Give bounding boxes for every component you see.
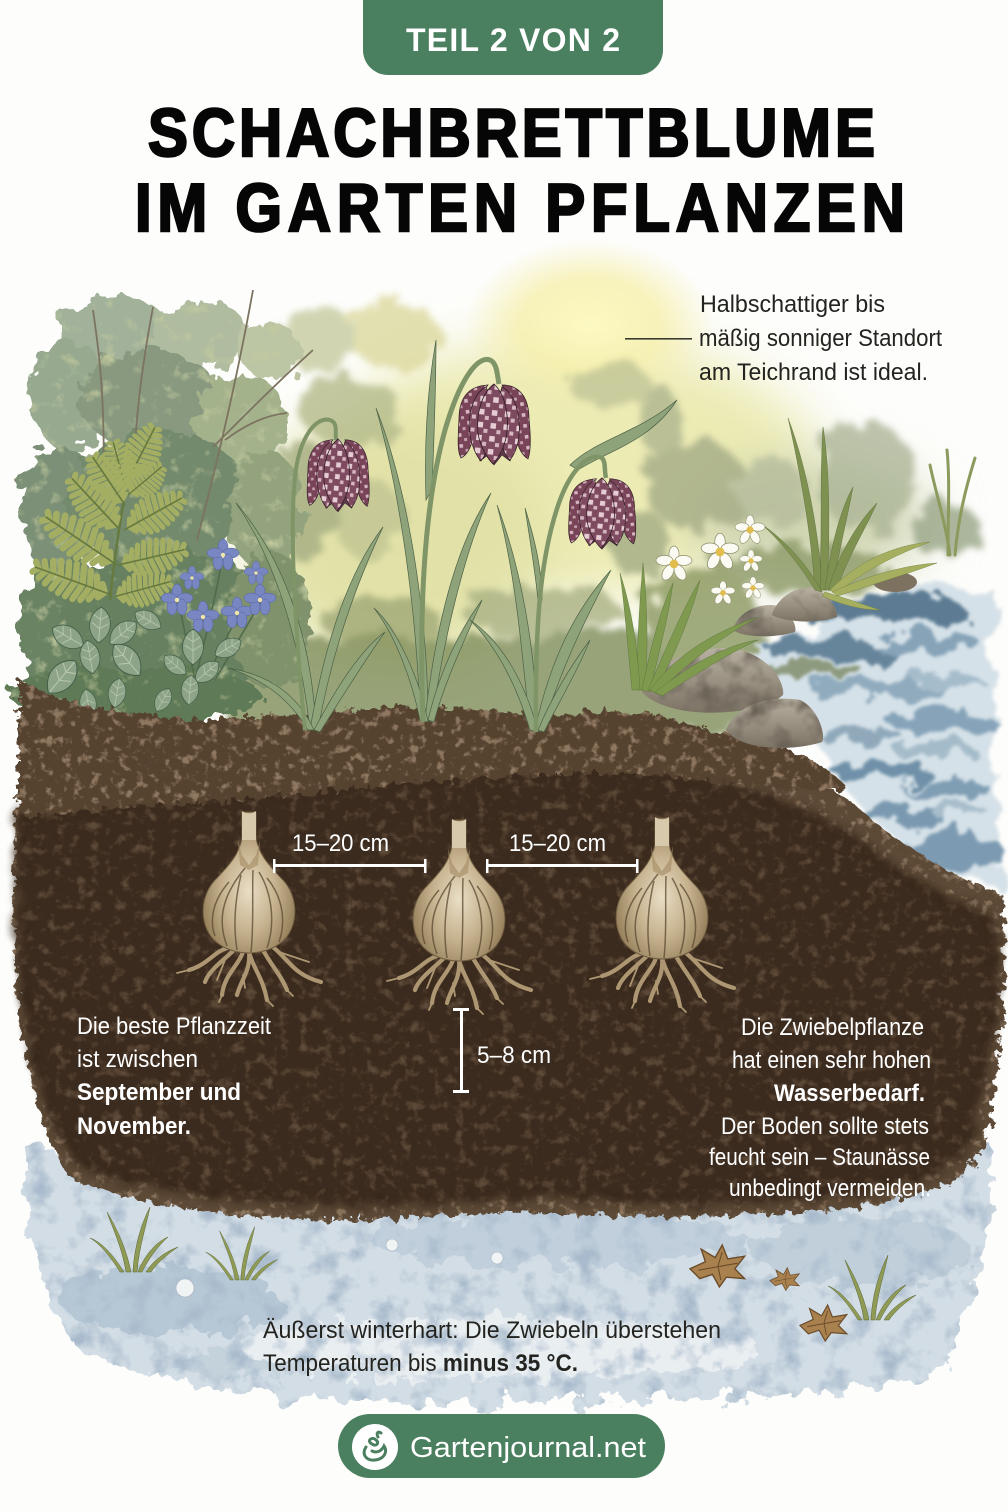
text: planting time bbox=[77, 1013, 271, 1140]
grass tufts bbox=[90, 1207, 916, 1320]
plant: left fritillary bbox=[228, 420, 385, 732]
soil cross-section bbox=[14, 758, 1004, 1220]
topsoil layer bbox=[18, 678, 845, 818]
text: water need: unbedingt vermeiden. bbox=[729, 1175, 931, 1202]
bulb 1 bbox=[177, 811, 321, 1006]
text: water need: Der Boden sollte stets bbox=[721, 1113, 929, 1140]
bulb 3 bbox=[590, 817, 734, 1012]
blue flowers bbox=[161, 539, 276, 680]
pebbles bbox=[176, 1239, 503, 1297]
text: water need: Wasserbedarf. bbox=[774, 1080, 925, 1107]
plant: right fritillary bbox=[470, 400, 677, 732]
text: sun location with pointer: am Teichrand ist ideal. bbox=[699, 359, 928, 386]
fern bbox=[28, 420, 190, 611]
text: planting time: ist zwischen bbox=[77, 1046, 198, 1073]
text: water need bbox=[709, 1014, 931, 1202]
pond bbox=[745, 588, 1005, 888]
text: sun location with pointer bbox=[625, 291, 942, 386]
text: planting time: November. bbox=[77, 1113, 191, 1140]
icon: gartenjournal logo bbox=[352, 1424, 398, 1470]
fallen leaves bbox=[690, 1245, 847, 1341]
footer brand text: Gartenjournal.net bbox=[410, 1432, 646, 1464]
spacing measure right bbox=[486, 830, 638, 873]
bulb 2 bbox=[387, 819, 531, 1014]
left shrub bbox=[10, 290, 313, 725]
bottom watercolor wash bbox=[25, 1130, 991, 1402]
depth measure bbox=[453, 1008, 551, 1093]
text: winter hardiness bbox=[263, 1317, 721, 1377]
footer logo pill bbox=[338, 1414, 665, 1478]
title: SCHACHBRETTBLUME bbox=[148, 94, 875, 171]
top badge bbox=[363, 0, 663, 75]
title: IM GARTEN PFLANZEN bbox=[135, 169, 905, 246]
text: sun location with pointer: Halbschattiger bis bbox=[700, 291, 885, 318]
text: winter hardiness: Temperaturen bis minus 35 °C. bbox=[263, 1350, 578, 1377]
title bbox=[135, 94, 905, 246]
low leaves bbox=[39, 605, 245, 718]
text: water need: feucht sein – Staunässe bbox=[709, 1144, 930, 1171]
depth measure: 5–8 cm bbox=[477, 1042, 551, 1069]
spacing measure left bbox=[273, 830, 426, 873]
watercolor garden background bbox=[230, 240, 980, 735]
text: sun location with pointer: mäßig sonniger Standort bbox=[699, 325, 942, 352]
spacing measure left: 15–20 cm bbox=[292, 830, 389, 857]
rocks bbox=[642, 572, 917, 748]
right grasses bbox=[620, 418, 975, 696]
daisies bbox=[656, 515, 765, 605]
top badge: TEIL 2 VON 2 bbox=[406, 22, 620, 58]
text: planting time: Die beste Pflanzzeit bbox=[77, 1013, 271, 1040]
text: winter hardiness: Äußerst winterhart: Die Zwiebeln überstehen bbox=[263, 1317, 721, 1344]
plant: middle fritillary bbox=[374, 340, 530, 722]
text: planting time: September und bbox=[77, 1079, 241, 1106]
spacing measure right: 15–20 cm bbox=[509, 830, 606, 857]
text: water need: Die Zwiebelpflanze bbox=[741, 1014, 924, 1041]
text: water need: hat einen sehr hohen bbox=[732, 1047, 931, 1074]
